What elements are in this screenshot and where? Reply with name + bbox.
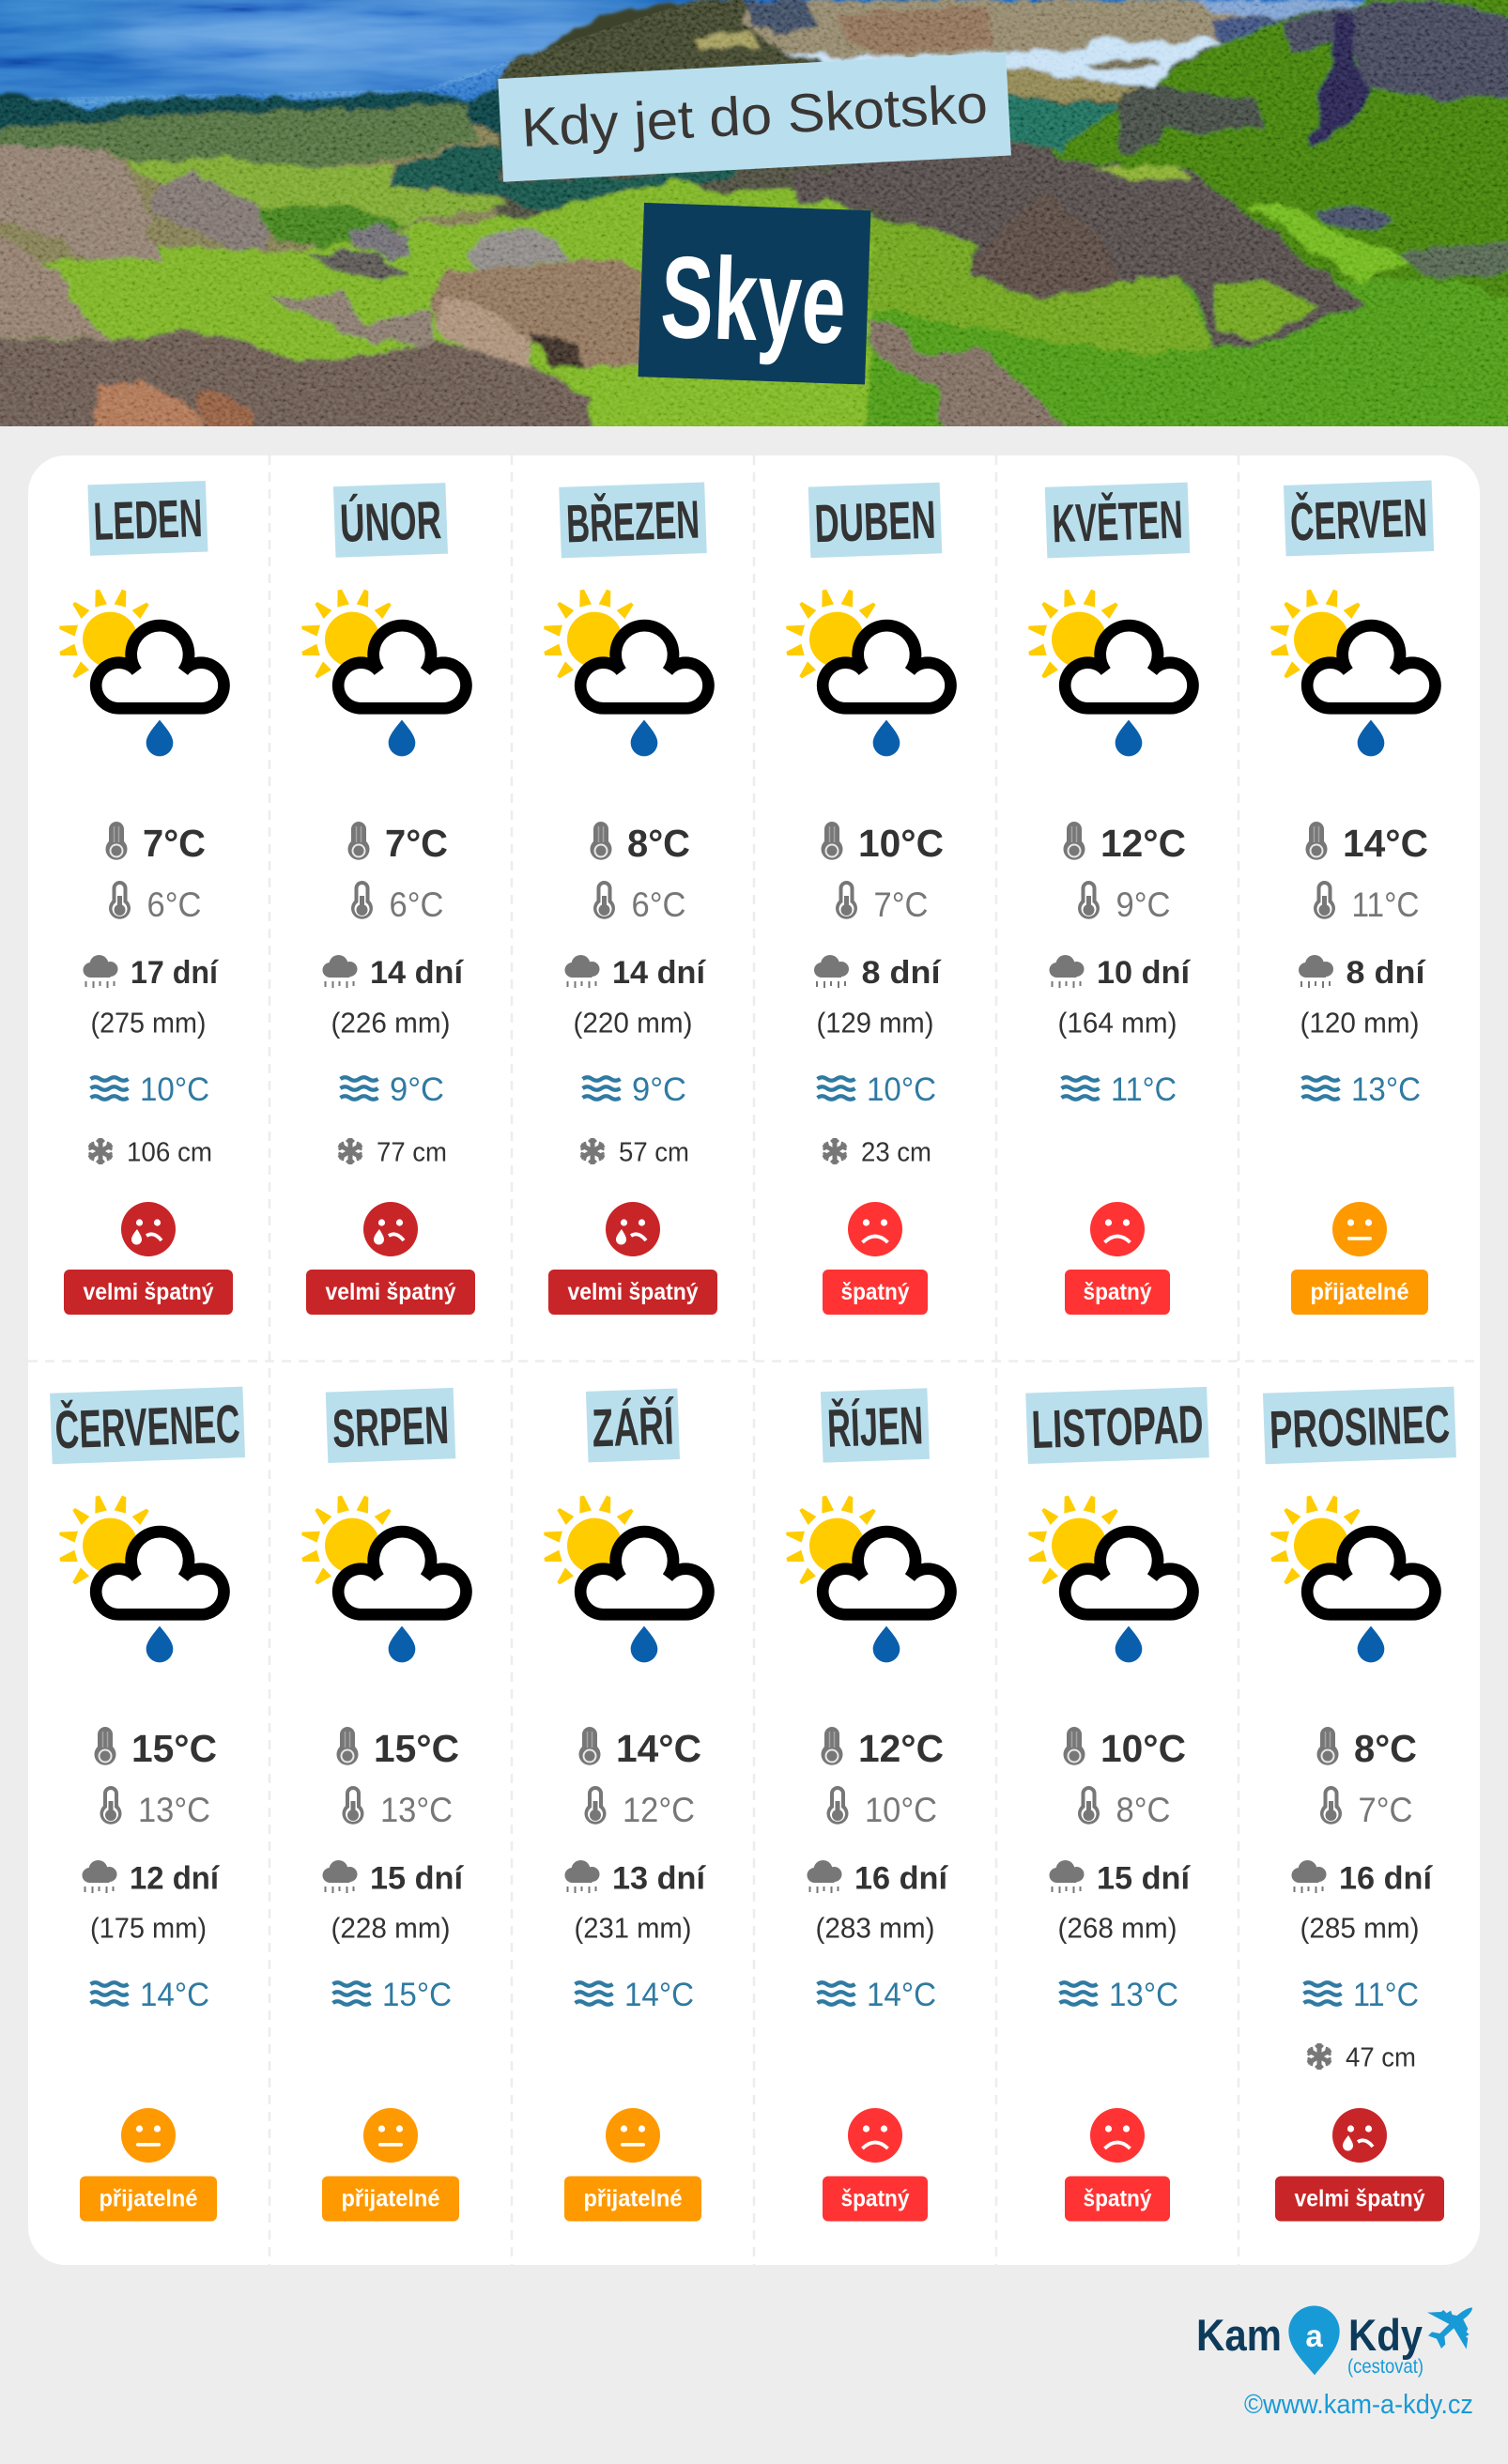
rating badge bbox=[1275, 2177, 1444, 2222]
snow: 23 cm bbox=[861, 1138, 931, 1168]
rain days bbox=[323, 955, 465, 991]
max temperature: 10°C bbox=[1100, 1727, 1186, 1770]
rating face bbox=[1090, 1202, 1145, 1256]
rating badge: velmi špatný bbox=[83, 1279, 214, 1305]
month label: ZÁŘÍ: ZÁŘÍ bbox=[591, 1394, 676, 1458]
icon: sun, cloud and rain bbox=[1270, 590, 1435, 756]
rain days: 8 dní bbox=[1346, 955, 1426, 991]
min temperature: 12°C bbox=[623, 1791, 695, 1829]
rating face bbox=[121, 2108, 176, 2163]
sea temperature: 15°C bbox=[382, 1977, 452, 2013]
month label: DUBEN bbox=[808, 483, 942, 558]
min temperature bbox=[1078, 881, 1170, 924]
rain days bbox=[1299, 955, 1426, 991]
column: květen bbox=[1028, 483, 1193, 1315]
month label: ČERVENEC bbox=[50, 1387, 245, 1464]
max temperature bbox=[347, 822, 448, 865]
max temperature: 12°C bbox=[1100, 822, 1186, 865]
icon: sun, cloud and rain bbox=[301, 1496, 466, 1662]
column: říjen bbox=[786, 1388, 950, 2222]
rating face bbox=[1090, 2108, 1145, 2163]
column: září bbox=[544, 1389, 708, 2222]
rating badge bbox=[564, 2177, 701, 2222]
website url: ©www.kam-a-kdy.cz bbox=[1244, 2390, 1473, 2420]
month label: LEDEN bbox=[87, 481, 208, 556]
rain days: 15 dní bbox=[370, 1861, 465, 1897]
rain days: 14 dní bbox=[370, 955, 465, 991]
rain days bbox=[565, 1860, 707, 1897]
rain days: 14 dní bbox=[612, 955, 707, 991]
sea temperature: 13°C bbox=[1351, 1071, 1421, 1108]
rating badge: špatný bbox=[1084, 1279, 1152, 1305]
rating badge bbox=[322, 2177, 459, 2222]
rating badge: přijatelné bbox=[584, 2186, 683, 2212]
rating face bbox=[606, 2108, 660, 2163]
sea temperature: 14°C bbox=[624, 1977, 694, 2013]
sea temperature: 13°C bbox=[1109, 1977, 1178, 2013]
icon: sun, cloud and rain bbox=[544, 590, 708, 756]
rating badge bbox=[80, 2177, 217, 2222]
rating badge bbox=[1065, 2177, 1170, 2222]
panel: months card bbox=[28, 455, 1480, 2265]
month label: ŘÍJEN bbox=[821, 1388, 930, 1463]
rain days: 17 dní bbox=[131, 955, 219, 991]
min temperature bbox=[1314, 881, 1420, 924]
sea temperature: 14°C bbox=[140, 1977, 209, 2013]
min temperature: 7°C bbox=[873, 886, 928, 924]
rainfall: (283 mm) bbox=[815, 1912, 935, 1944]
logo word: Kam: Kam bbox=[1196, 2310, 1282, 2360]
icon: sun, cloud and rain bbox=[59, 590, 223, 756]
rain days: 16 dní bbox=[1339, 1861, 1434, 1897]
sea temperature bbox=[1303, 1977, 1419, 2013]
icon: sun, cloud and rain bbox=[544, 1496, 708, 1662]
rain days bbox=[808, 1860, 949, 1897]
max temperature bbox=[105, 822, 206, 865]
min temperature bbox=[100, 1786, 210, 1829]
title tag: Kdy jet do Skotsko: Kdy jet do Skotsko bbox=[520, 73, 989, 159]
rainfall: (120 mm) bbox=[1300, 1007, 1420, 1039]
month label: ZÁŘÍ bbox=[586, 1389, 680, 1462]
sea temperature: 9°C bbox=[632, 1071, 686, 1108]
icon: sun, cloud and rain bbox=[1028, 1496, 1193, 1662]
max temperature: 14°C bbox=[1343, 822, 1428, 865]
month label: BŘEZEN bbox=[559, 483, 707, 558]
rating badge bbox=[823, 2177, 928, 2222]
column: červen bbox=[1270, 480, 1435, 1315]
snow bbox=[1307, 2043, 1416, 2073]
icon: sun, cloud and rain bbox=[1028, 590, 1193, 756]
rain days: 15 dní bbox=[1097, 1861, 1192, 1897]
rating badge bbox=[823, 1270, 928, 1315]
month label: SRPEN: SRPEN bbox=[331, 1395, 450, 1459]
rating badge bbox=[1291, 1270, 1428, 1315]
header photo: Skye landscape bbox=[0, 0, 1508, 454]
rainfall: (164 mm) bbox=[1057, 1007, 1177, 1039]
sea temperature bbox=[817, 1977, 936, 2013]
rainfall: (129 mm) bbox=[817, 1007, 933, 1039]
sea temperature bbox=[332, 1977, 452, 2013]
max temperature: 12°C bbox=[858, 1727, 944, 1770]
max temperature bbox=[578, 1727, 701, 1770]
month label: SRPEN bbox=[326, 1388, 455, 1463]
icon: map pin: a bbox=[1305, 2318, 1323, 2353]
max temperature bbox=[1063, 1727, 1186, 1770]
min temperature bbox=[342, 1786, 453, 1829]
rainfall: (228 mm) bbox=[331, 1912, 451, 1944]
snow: 106 cm bbox=[127, 1138, 212, 1168]
rating badge: velmi špatný bbox=[1294, 2186, 1425, 2212]
logo word: Kdy: Kdy bbox=[1348, 2310, 1423, 2360]
min temperature bbox=[826, 1786, 937, 1829]
rating badge: přijatelné bbox=[100, 2186, 198, 2212]
rain days bbox=[565, 955, 707, 991]
sea temperature: 10°C bbox=[140, 1071, 209, 1108]
min temperature: 6°C bbox=[631, 886, 685, 924]
snow: 57 cm bbox=[619, 1138, 689, 1168]
rain days bbox=[1050, 1860, 1192, 1897]
rating badge bbox=[64, 1270, 233, 1315]
logo subtitle: (cestovat) bbox=[1347, 2356, 1423, 2378]
min temperature bbox=[584, 1786, 695, 1829]
month label: ÚNOR bbox=[333, 483, 448, 558]
month label: KVĚTEN: KVĚTEN bbox=[1051, 489, 1184, 554]
month label: ČERVEN bbox=[1284, 480, 1434, 556]
max temperature: 14°C bbox=[616, 1727, 701, 1770]
icon: airplane bbox=[1427, 2307, 1472, 2349]
snow: 47 cm bbox=[1346, 2043, 1416, 2073]
rating face bbox=[1332, 1202, 1387, 1256]
snow bbox=[823, 1138, 931, 1168]
month label: ŘÍJEN: ŘÍJEN bbox=[826, 1394, 924, 1459]
min temperature bbox=[351, 881, 443, 924]
rain days: 8 dní bbox=[862, 955, 942, 991]
title tag: Kdy jet do Skotsko bbox=[498, 53, 1011, 182]
rating face bbox=[848, 2108, 902, 2163]
rain days bbox=[83, 1860, 221, 1897]
rating badge: přijatelné bbox=[342, 2186, 440, 2212]
sea temperature: 9°C bbox=[390, 1071, 444, 1108]
min temperature: 7°C bbox=[1358, 1791, 1412, 1829]
min temperature: 6°C bbox=[146, 886, 201, 924]
sea temperature bbox=[1061, 1071, 1177, 1108]
max temperature bbox=[1305, 822, 1428, 865]
sea temperature bbox=[575, 1977, 694, 2013]
logo: Kam a Kdy bbox=[1196, 2305, 1472, 2378]
month label: ČERVENEC: ČERVENEC bbox=[54, 1394, 241, 1460]
sea temperature: 11°C bbox=[1111, 1071, 1177, 1108]
max temperature bbox=[1063, 822, 1186, 865]
rating badge: velmi špatný bbox=[567, 1279, 699, 1305]
max temperature bbox=[94, 1727, 217, 1770]
month label: ČERVEN: ČERVEN bbox=[1289, 486, 1428, 553]
min temperature bbox=[1078, 1786, 1170, 1829]
rating face bbox=[121, 1202, 176, 1256]
rain days bbox=[323, 1860, 465, 1897]
rating face bbox=[606, 1202, 660, 1256]
sea temperature bbox=[90, 1977, 209, 2013]
column: duben bbox=[786, 483, 950, 1315]
rainfall: (285 mm) bbox=[1300, 1912, 1420, 1944]
rainfall: (268 mm) bbox=[1057, 1912, 1177, 1944]
rainfall: (220 mm) bbox=[573, 1007, 693, 1039]
max temperature: 7°C bbox=[143, 822, 206, 865]
rain days bbox=[83, 955, 219, 991]
snow bbox=[338, 1138, 447, 1168]
min temperature bbox=[1320, 1786, 1412, 1829]
rating face bbox=[363, 2108, 418, 2163]
rainfall: (275 mm) bbox=[90, 1007, 207, 1039]
min temperature: 13°C bbox=[380, 1791, 453, 1829]
rain days bbox=[1292, 1860, 1434, 1897]
max temperature: 10°C bbox=[858, 822, 944, 865]
icon: sun, cloud and rain bbox=[786, 1496, 950, 1662]
sea temperature bbox=[1301, 1071, 1421, 1108]
max temperature: 7°C bbox=[385, 822, 448, 865]
snow bbox=[580, 1138, 689, 1168]
rating badge: velmi špatný bbox=[325, 1279, 456, 1305]
rating face bbox=[848, 1202, 902, 1256]
max temperature bbox=[590, 822, 690, 865]
rain days bbox=[1050, 955, 1192, 991]
icon: sun, cloud and rain bbox=[1270, 1496, 1435, 1662]
title tag: Skye: Skye bbox=[658, 233, 848, 368]
sea temperature bbox=[90, 1071, 209, 1108]
month label: BŘEZEN: BŘEZEN bbox=[565, 489, 700, 554]
column: prosinec bbox=[1263, 1387, 1456, 2222]
rainfall: (231 mm) bbox=[575, 1912, 691, 1944]
month label: KVĚTEN bbox=[1045, 483, 1190, 558]
column: leden bbox=[59, 481, 233, 1315]
sea temperature: 11°C bbox=[1353, 1977, 1419, 2013]
min temperature bbox=[109, 881, 201, 924]
column: červenec bbox=[50, 1387, 245, 2222]
min temperature: 10°C bbox=[865, 1791, 937, 1829]
rain days: 12 dní bbox=[130, 1861, 221, 1897]
rating badge bbox=[306, 1270, 475, 1315]
month label: LISTOPAD: LISTOPAD bbox=[1031, 1394, 1205, 1460]
sea temperature: 14°C bbox=[867, 1977, 936, 2013]
column: srpen bbox=[301, 1388, 466, 2222]
icon: sun, cloud and rain bbox=[301, 590, 466, 756]
min temperature: 6°C bbox=[389, 886, 443, 924]
icon: map pin bbox=[1288, 2305, 1340, 2375]
month label: LISTOPAD bbox=[1025, 1387, 1209, 1464]
max temperature: 15°C bbox=[374, 1727, 459, 1770]
min temperature bbox=[593, 881, 685, 924]
rating face bbox=[363, 1202, 418, 1256]
rating badge: špatný bbox=[1084, 2186, 1152, 2212]
icon: sun, cloud and rain bbox=[786, 590, 950, 756]
rain days: 10 dní bbox=[1097, 955, 1192, 991]
column: březen bbox=[544, 483, 717, 1315]
rain days: 16 dní bbox=[854, 1861, 949, 1897]
rating badge bbox=[548, 1270, 717, 1315]
rain days bbox=[814, 955, 942, 991]
max temperature bbox=[1316, 1727, 1417, 1770]
month label: LEDEN: LEDEN bbox=[92, 488, 204, 552]
max temperature: 8°C bbox=[627, 822, 690, 865]
rainfall: (175 mm) bbox=[90, 1912, 207, 1944]
rating badge: přijatelné bbox=[1311, 1279, 1409, 1305]
rating badge: špatný bbox=[841, 1279, 910, 1305]
rain days: 13 dní bbox=[612, 1861, 707, 1897]
snow: 77 cm bbox=[377, 1138, 447, 1168]
column: listopad bbox=[1025, 1387, 1209, 2222]
sea temperature bbox=[340, 1071, 444, 1108]
max temperature bbox=[336, 1727, 459, 1770]
min temperature bbox=[836, 881, 928, 924]
max temperature bbox=[821, 822, 944, 865]
sea temperature: 10°C bbox=[867, 1071, 936, 1108]
rating badge bbox=[1065, 1270, 1170, 1315]
month label: DUBEN: DUBEN bbox=[813, 490, 937, 554]
month label: ÚNOR: ÚNOR bbox=[339, 490, 442, 554]
rating badge: špatný bbox=[841, 2186, 910, 2212]
min temperature: 13°C bbox=[138, 1791, 210, 1829]
min temperature: 9°C bbox=[1116, 886, 1170, 924]
rainfall: (226 mm) bbox=[331, 1007, 451, 1039]
rating face bbox=[1332, 2108, 1387, 2163]
min temperature: 11°C bbox=[1352, 886, 1420, 924]
title tag: Skye bbox=[639, 203, 870, 385]
max temperature: 15°C bbox=[131, 1727, 217, 1770]
snow bbox=[88, 1138, 212, 1168]
min temperature: 8°C bbox=[1116, 1791, 1170, 1829]
max temperature: 8°C bbox=[1354, 1727, 1417, 1770]
sea temperature bbox=[817, 1071, 936, 1108]
column: únor bbox=[301, 483, 475, 1315]
icon: sun, cloud and rain bbox=[59, 1496, 223, 1662]
sea temperature bbox=[582, 1071, 686, 1108]
max temperature bbox=[821, 1727, 944, 1770]
sea temperature bbox=[1059, 1977, 1178, 2013]
